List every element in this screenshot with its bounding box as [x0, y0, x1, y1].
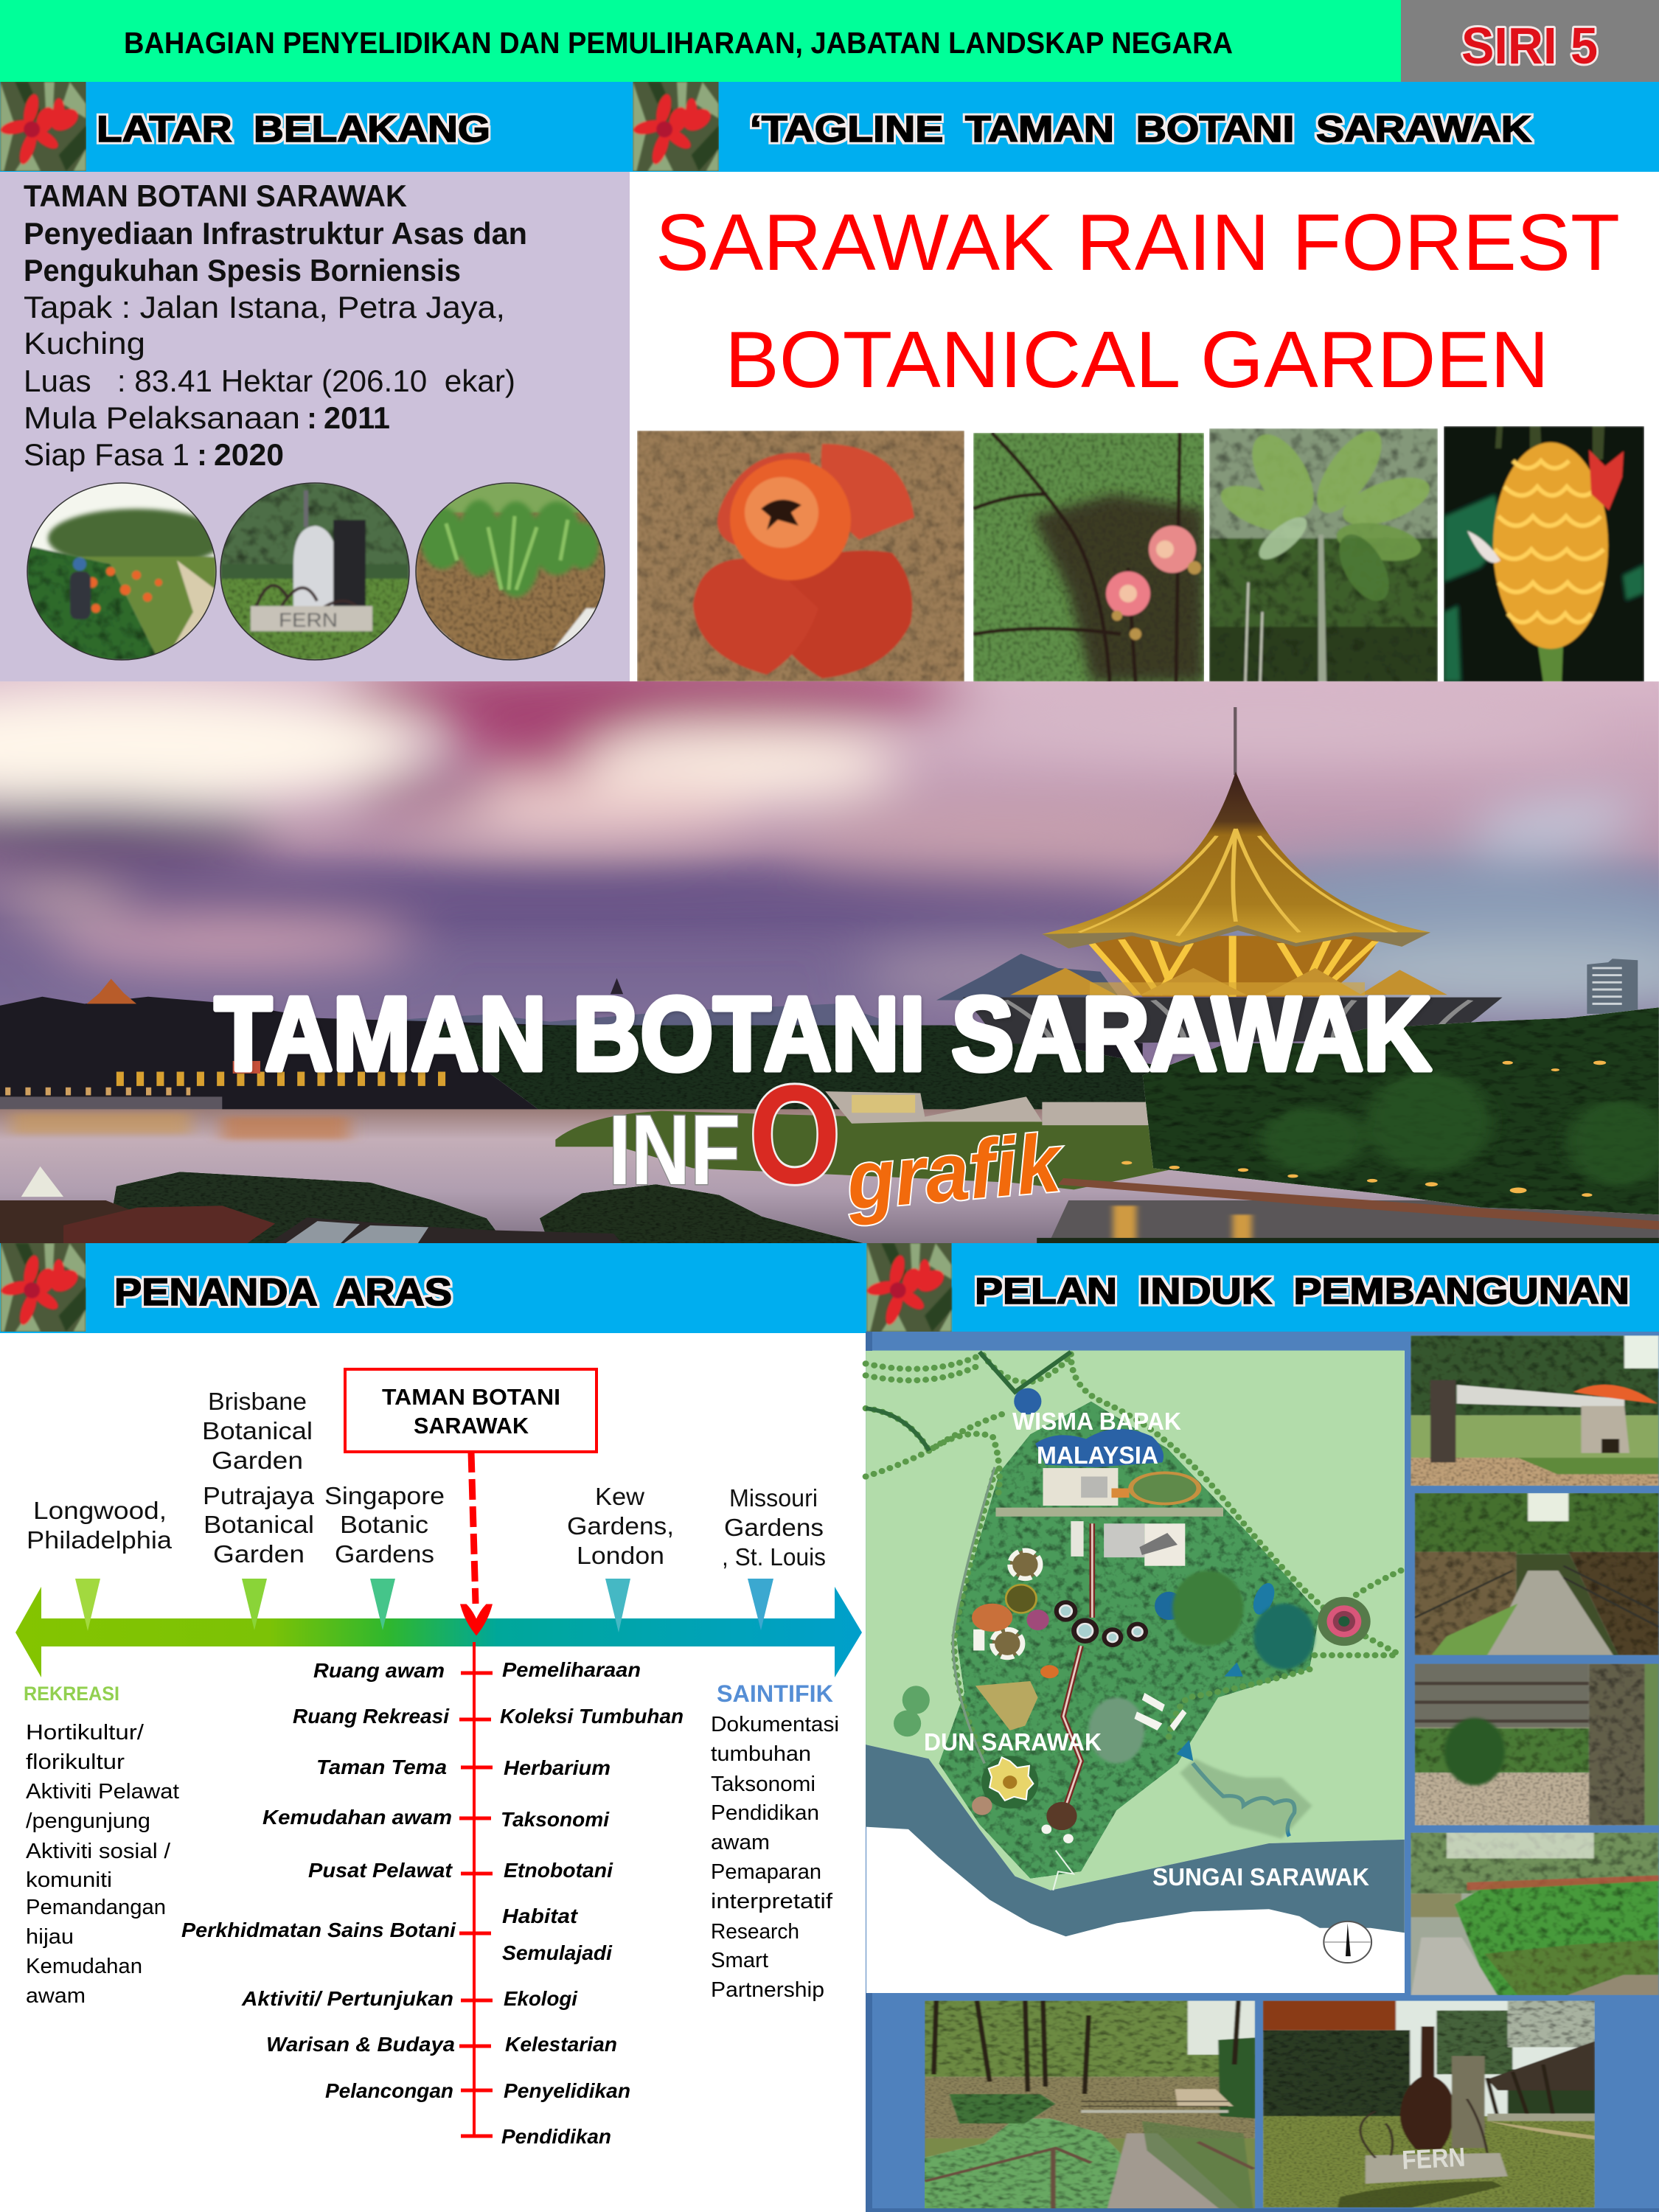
section header: penanda aras: PENANDA ARAS — [114, 1271, 452, 1314]
benchmark location labels: Botanic — [340, 1511, 428, 1538]
series badge: SIRI 5 — [1461, 17, 1598, 74]
science items: Taksonomi — [501, 1808, 610, 1831]
DUN garden — [894, 1686, 1077, 1891]
header organisation text: BAHAGIAN PENYELIDIKAN DAN PEMULIHARAAN, JABATAN LANDSKAP NEGARA — [124, 26, 1233, 60]
background text block: Tapak : Jalan Istana, Petra Jaya, — [24, 290, 505, 324]
rekreasi list: awam — [26, 1984, 86, 2008]
benchmark location labels: Brisbane — [208, 1388, 307, 1415]
background text block: Penyediaan Infrastruktur Asas dan — [24, 216, 527, 251]
science items: Ekologi — [504, 1987, 578, 2010]
terrace buildings — [825, 1091, 1158, 1125]
saintifik list: Pemaparan — [711, 1860, 821, 1884]
recreation items: Ruang awam — [313, 1659, 445, 1682]
benchmark location labels: Singapore — [324, 1482, 445, 1509]
photo: cannonball tree — [973, 433, 1204, 682]
park grounds — [939, 1401, 1320, 1879]
photo: shade house — [1415, 1663, 1659, 1826]
red axis with ticks — [459, 1642, 493, 2136]
background text block: Mula Pelaksanaan — [24, 400, 300, 435]
science items: Koleksi Tumbuhan — [500, 1705, 684, 1728]
benchmark location labels: Garden — [212, 1447, 303, 1474]
hero photo: Sarawak legislative building at dusk — [0, 661, 1659, 1247]
infografik wordmark — [608, 1057, 1067, 1227]
city lights — [5, 1061, 455, 1091]
central walkway — [1063, 1523, 1092, 1806]
distant temple — [87, 978, 136, 1004]
office tower — [1587, 959, 1638, 1014]
photo: planting bed — [1411, 1832, 1659, 1995]
saintifik list: Taksonomi — [711, 1773, 815, 1796]
rekreasi list: komuniti — [26, 1868, 112, 1892]
photo: forest stairs — [924, 2000, 1255, 2212]
recreation items: Perkhidmatan Sains Botani — [181, 1919, 456, 1941]
benchmark location labels: , St. Louis — [722, 1543, 826, 1571]
series badge — [1401, 0, 1659, 82]
hero title: TAMAN BOTANI SARAWAK — [215, 975, 1431, 1093]
benchmark location labels: Missouri — [729, 1484, 818, 1512]
infografik wordmark: INF — [608, 1094, 740, 1206]
roundabout garden — [1318, 1597, 1371, 1646]
circular photo: garden path — [27, 483, 225, 660]
walkway — [1058, 1178, 1659, 1230]
photo: tree fern — [1209, 421, 1438, 682]
themed gardens — [1010, 1551, 1040, 1579]
circular photo: fern sculpture: FERN — [279, 609, 338, 631]
background text block: : — [307, 400, 317, 435]
photo: fern sculpture — [1263, 2000, 1595, 2208]
recreation items — [181, 1659, 456, 2102]
section header: penanda aras — [0, 1243, 866, 1333]
site photos bottom row — [924, 2000, 1595, 2212]
site photos right column — [1411, 1335, 1659, 1995]
top header banner — [0, 0, 1401, 82]
stream — [1193, 1764, 1295, 1836]
background text block: 2011 — [324, 400, 390, 435]
science items: Pendidikan — [501, 2125, 611, 2148]
tree-lined roads — [866, 1354, 1401, 1759]
photo: rafflesia — [637, 431, 964, 682]
section header: tagline: ‘TAGLINE TAMAN BOTANI SARAWAK — [750, 108, 1531, 150]
master plan map — [866, 1351, 1405, 1993]
science items: Herbarium — [504, 1756, 611, 1779]
background text block: TAMAN BOTANI SARAWAK — [24, 178, 407, 213]
saintifik heading: SAINTIFIK — [717, 1680, 833, 1707]
panel: pelan induk background — [866, 1332, 1659, 2212]
compass — [1324, 1921, 1371, 1963]
left dark treeline — [0, 997, 1143, 1129]
benchmark location labels: Garden — [213, 1540, 305, 1568]
rekreasi list: /pengunjung — [26, 1809, 150, 1833]
benchmark location labels: Philadelphia — [27, 1526, 173, 1554]
tagline title: SARAWAK RAIN FOREST — [655, 198, 1620, 288]
section header: latar belakang — [0, 82, 633, 172]
section header: tagline — [632, 82, 1659, 172]
science items: Semulajadi — [502, 1941, 613, 1964]
photo: entrance gate — [1411, 1335, 1659, 1486]
rekreasi list: Aktiviti sosial / — [26, 1840, 171, 1863]
background text block: Pengukuhan Spesis Borniensis — [24, 253, 461, 288]
map land — [866, 1351, 1405, 1891]
rekreasi list: florikultur — [26, 1750, 125, 1774]
circular photo: fern sculpture — [220, 483, 409, 660]
rekreasi heading: REKREASI — [24, 1683, 119, 1705]
rekreasi list: Hortikultur/ — [26, 1721, 145, 1745]
rekreasi list: Pemandangan — [26, 1896, 166, 1919]
map labels: DUN SARAWAK — [924, 1728, 1102, 1756]
science items: Pemeliharaan — [502, 1658, 641, 1681]
benchmark location labels: Botanical — [202, 1417, 313, 1444]
section header: pelan induk pembangunan: PELAN INDUK PEMBANGUNAN — [975, 1270, 1630, 1312]
infografik wordmark: grafik — [842, 1116, 1067, 1227]
recreation items: Pusat Pelawat — [308, 1859, 453, 1882]
benchmark location labels: Gardens, — [567, 1512, 674, 1540]
tagline title — [655, 198, 1620, 405]
saintifik list: Smart — [711, 1949, 768, 1972]
right trees — [1143, 1007, 1659, 1214]
benchmark location labels — [27, 1388, 826, 1571]
recreation items: Pelancongan — [325, 2079, 453, 2102]
saintifik list: tumbuhan — [711, 1742, 811, 1766]
recreation items: Taman Tema — [316, 1756, 447, 1778]
legislative building — [963, 707, 1503, 1047]
science items: Penyelidikan — [504, 2079, 630, 2102]
section header: pelan induk pembangunan — [866, 1243, 1659, 1332]
horizontal double arrow — [15, 1587, 862, 1677]
lake and water features — [1014, 1388, 1279, 1761]
science items — [500, 1658, 684, 2148]
map labels: MALAYSIA — [1037, 1441, 1158, 1469]
rekreasi list — [26, 1721, 179, 2008]
saintifik list: Dokumentasi — [711, 1713, 839, 1736]
panel: latar belakang — [0, 172, 630, 682]
rekreasi list: hijau — [26, 1925, 74, 1949]
callout: taman botani sarawak: SARAWAK — [414, 1413, 529, 1439]
lawn — [555, 1111, 1169, 1189]
background text block: 2020 — [214, 437, 284, 472]
background text block: Luas : 83.41 Hektar (206.10 ekar) — [24, 364, 515, 398]
science items: Habitat — [502, 1905, 579, 1927]
background text block: : — [197, 437, 207, 472]
infografik wordmark: O — [749, 1057, 841, 1213]
callout: taman botani sarawak — [345, 1369, 597, 1452]
recreation items: Warisan & Budaya — [266, 2033, 455, 2056]
saintifik list: interpretatif — [711, 1890, 833, 1913]
saintifik list — [711, 1713, 839, 2002]
right edge strips — [866, 1993, 872, 2212]
saintifik list: Research — [711, 1920, 799, 1944]
sky clouds — [0, 661, 1659, 1018]
science items: Kelestarian — [505, 2033, 617, 2056]
science items: Etnobotani — [504, 1859, 613, 1882]
benchmark location labels: Longwood, — [33, 1497, 167, 1524]
river — [0, 1109, 1659, 1246]
benchmark location labels: Botanical — [204, 1511, 314, 1538]
benchmark location labels: London — [577, 1542, 664, 1569]
saintifik list: awam — [711, 1831, 770, 1854]
benchmark location labels: Gardens — [724, 1514, 824, 1541]
FERN sign lettering: FERN — [1401, 2142, 1466, 2175]
map labels: WISMA BAPAK — [1012, 1408, 1181, 1435]
background text block: Siap Fasa 1 — [24, 437, 189, 472]
recreation items: Aktiviti/ Pertunjukan — [241, 1987, 453, 2010]
benchmark location labels: Putrajaya — [203, 1482, 315, 1509]
river — [866, 1745, 1405, 1936]
callout: taman botani sarawak: TAMAN BOTANI — [382, 1384, 560, 1410]
circular photo: young plants — [416, 483, 605, 660]
background text block: Kuching — [24, 326, 145, 361]
mountain — [936, 954, 1121, 1001]
map labels: SUNGAI SARAWAK — [1152, 1863, 1369, 1891]
map labels — [924, 1408, 1369, 1891]
saintifik list: Partnership — [711, 1978, 824, 2002]
recreation items: Kemudahan awam — [262, 1806, 452, 1829]
photo: stone path — [1415, 1493, 1659, 1655]
foreground trees and houses — [105, 1172, 508, 1247]
visitor nodes — [1054, 1600, 1148, 1647]
science woodland — [1088, 1571, 1315, 1764]
panel: penanda aras benchmark diagram — [15, 1369, 862, 2148]
photo: beehive ginger — [1444, 426, 1644, 682]
upper buildings — [1043, 1468, 1118, 1506]
red dashed arrow — [462, 1452, 491, 1634]
background text block — [24, 178, 527, 472]
benchmark markers — [75, 1579, 773, 1632]
rekreasi list: Kemudahan — [26, 1955, 142, 1978]
tagline title: BOTANICAL GARDEN — [725, 315, 1549, 405]
section header: latar belakang: LATAR BELAKANG — [97, 108, 490, 150]
benchmark location labels: Kew — [595, 1483, 644, 1510]
rekreasi list: Aktiviti Pelawat — [26, 1780, 179, 1804]
recreation items: Ruang Rekreasi — [293, 1705, 450, 1728]
left edge darker strip — [866, 1332, 872, 1351]
benchmark location labels: Gardens — [335, 1540, 434, 1568]
saintifik list: Pendidikan — [711, 1801, 819, 1825]
